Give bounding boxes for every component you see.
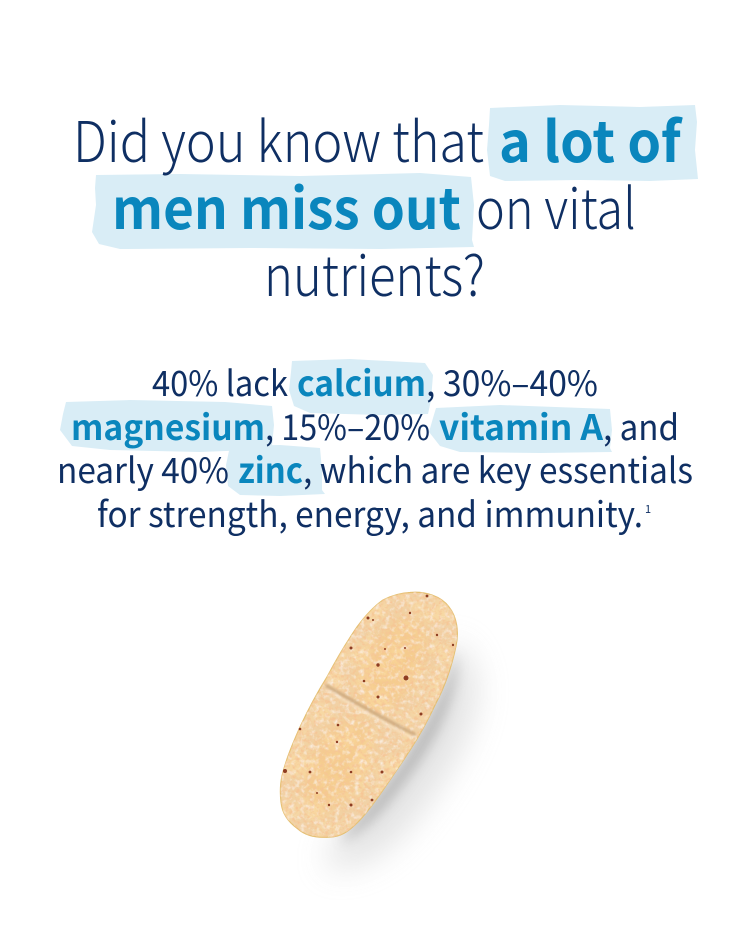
emphasis: vitamin A: vitamin A: [439, 400, 604, 451]
body line 1: 40% lack: [152, 356, 288, 407]
infographic canvas: [60, 105, 698, 872]
emphasis: magnesium: magnesium: [71, 400, 265, 451]
highlight: a lot of: [487, 105, 698, 181]
tablet score line: [327, 686, 414, 738]
highlight: zinc: [226, 445, 325, 496]
emphasis: men miss out: men miss out: [112, 165, 461, 246]
heading: [73, 98, 698, 313]
heading line 1: Did you know that: [73, 98, 484, 179]
vitamin tablet: [270, 585, 477, 869]
emphasis: calcium: calcium: [297, 356, 426, 407]
heading line 3: nutrients?: [264, 232, 485, 313]
body line 2 middle: , 15%–20%: [265, 400, 430, 451]
emphasis: zinc: zinc: [238, 443, 303, 494]
tablet shadow: [325, 640, 477, 869]
heading line 2: on vital: [476, 165, 636, 246]
tablet texture: [280, 592, 458, 838]
body line 3 start: nearly 40%: [57, 443, 229, 494]
tablet speckles: [283, 595, 454, 806]
highlight: vitamin A: [429, 405, 612, 453]
body line 1 end: , 30%–40%: [426, 356, 598, 407]
tablet body: [280, 592, 457, 837]
body line 2 end: , and: [603, 400, 679, 451]
highlight: calcium: [289, 359, 433, 415]
body paragraph: [57, 356, 693, 538]
emphasis: a lot of: a lot of: [499, 98, 683, 179]
highlight: men miss out: [92, 173, 474, 249]
body line 4: for strength, energy, and immunity.: [97, 487, 643, 538]
footnote marker: 1: [645, 501, 651, 517]
highlight: magnesium: [60, 400, 278, 452]
body line 3 end: , which are key essentials: [303, 443, 693, 494]
